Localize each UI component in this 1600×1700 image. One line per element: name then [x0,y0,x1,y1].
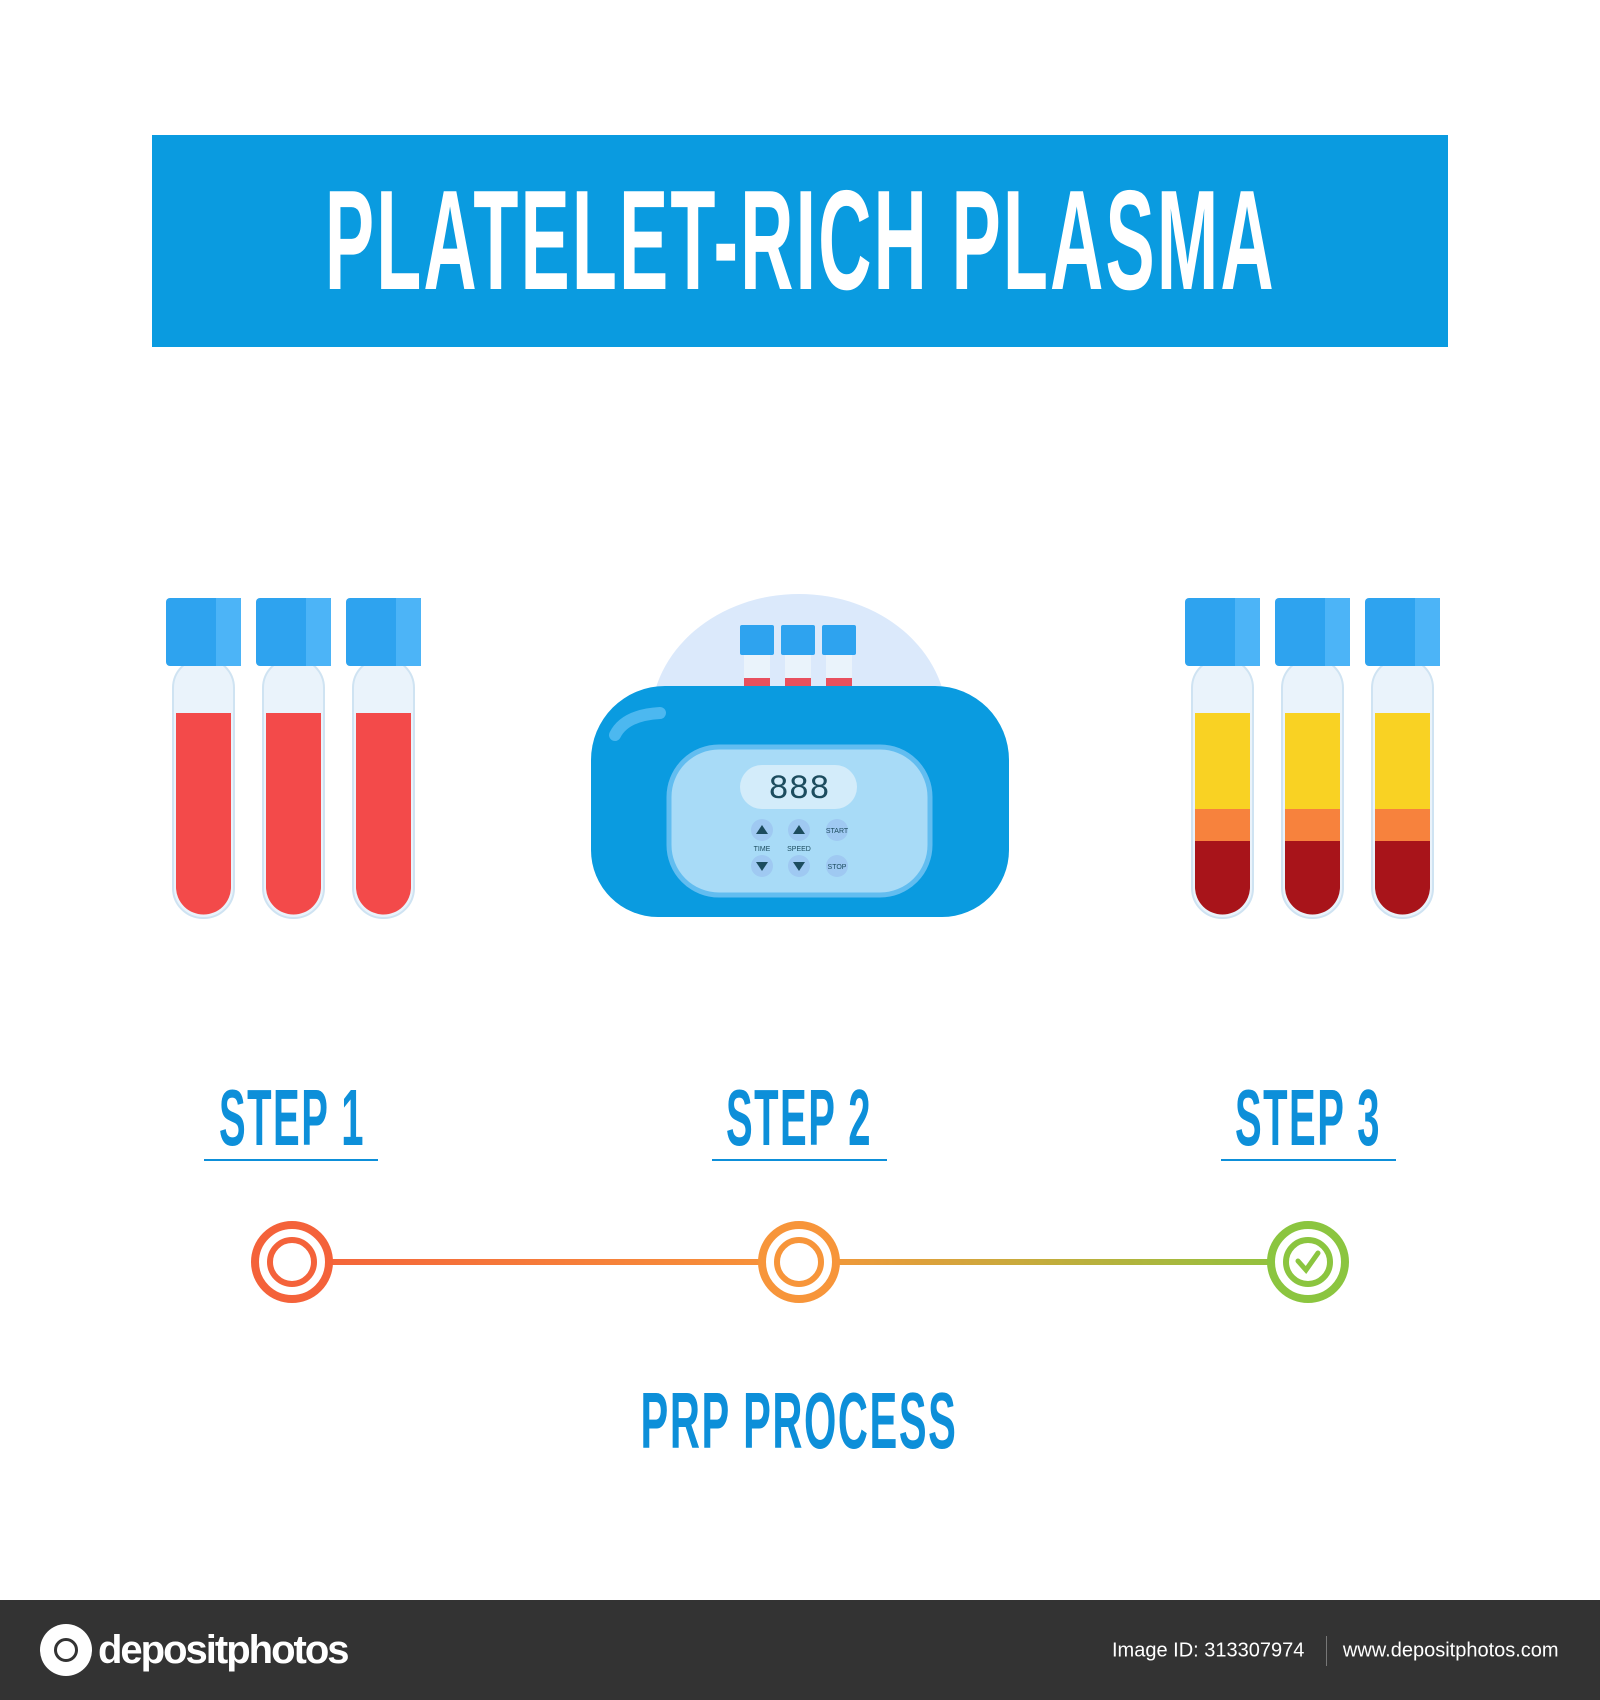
step labels: STEP 2 [726,1074,872,1163]
centrifuge: START [826,828,849,835]
tubes: step 3 separated [1185,598,1440,918]
step labels: STEP 3 [1235,1074,1381,1163]
centrifuge: TIME [754,846,771,853]
footer [0,1600,1600,1700]
logo [40,1624,348,1676]
centrifuge [591,594,1009,917]
title banner [152,135,1448,347]
centrifuge: SPEED [787,846,811,853]
logo: depositphotos [98,1628,348,1672]
image id: Image ID: 313307974 www.depositphotos.com [1112,1639,1559,1661]
timeline [255,1225,1345,1299]
step labels [204,1074,1396,1163]
subtitle: PRP PROCESS [641,1375,957,1466]
centrifuge: STOP [828,864,847,871]
step labels: STEP 1 [219,1074,365,1163]
title: PLATELET-RICH PLASMA [325,161,1275,320]
centrifuge: 888 [768,771,830,809]
tubes: step 1 blood [166,598,421,918]
